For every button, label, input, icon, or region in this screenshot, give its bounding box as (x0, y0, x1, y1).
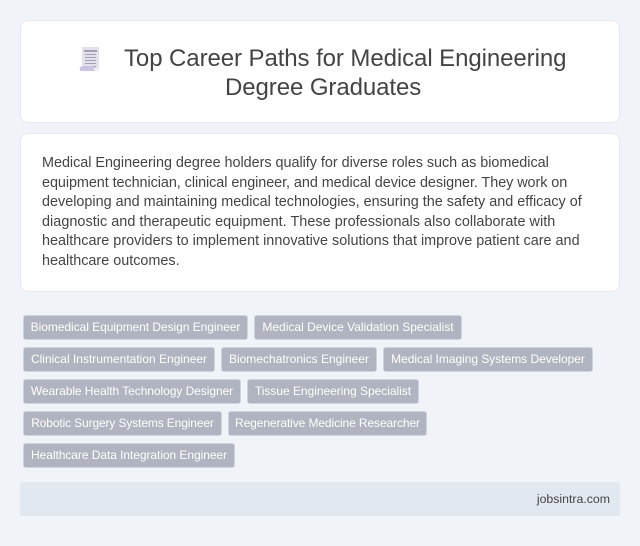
tag (221, 347, 377, 372)
description text (42, 155, 582, 268)
tag: Robotic Surgery Systems Engineer (31, 416, 214, 430)
tag (23, 443, 235, 468)
description text: equipment technician, clinical engineer, and medical device designer. They work on (42, 174, 567, 190)
tag: Wearable Health Technology Designer (31, 384, 233, 398)
tag (383, 347, 593, 372)
footer bar (20, 482, 620, 516)
tag (23, 379, 241, 404)
title (124, 45, 566, 101)
tag (228, 411, 427, 436)
tag: Regenerative Medicine Researcher (235, 416, 420, 430)
tag: Medical Imaging Systems Developer (391, 352, 585, 366)
description text: diagnostic and therapeutic equipment. These professionals also collaborate with (42, 214, 555, 230)
description text: Medical Engineering degree holders qualify for diverse roles such as biomedical (42, 155, 549, 171)
description text: developing and maintaining medical technologies, ensuring the safety and efficacy of (42, 194, 582, 210)
icon: document scroll (80, 47, 99, 71)
tag (23, 411, 222, 436)
tag: Clinical Instrumentation Engineer (31, 352, 207, 366)
header panel (20, 20, 620, 123)
footer source text: jobsintra.com (537, 492, 610, 506)
title: Degree Graduates (225, 74, 421, 101)
tag (23, 347, 215, 372)
tag: Medical Device Validation Specialist (262, 320, 454, 334)
tag (247, 379, 419, 404)
tag: Healthcare Data Integration Engineer (31, 448, 227, 462)
tag: Biomechatronics Engineer (229, 352, 369, 366)
description text: healthcare providers to implement innovative solutions that improve patient care and (42, 233, 580, 249)
description panel (20, 133, 620, 292)
description text: healthcare outcomes. (42, 252, 180, 268)
tag: Tissue Engineering Specialist (255, 384, 411, 398)
tags group (23, 315, 593, 468)
title: Top Career Paths for Medical Engineering (124, 45, 566, 72)
tag (23, 315, 248, 340)
tag (254, 315, 462, 340)
tag: Biomedical Equipment Design Engineer (31, 320, 240, 334)
